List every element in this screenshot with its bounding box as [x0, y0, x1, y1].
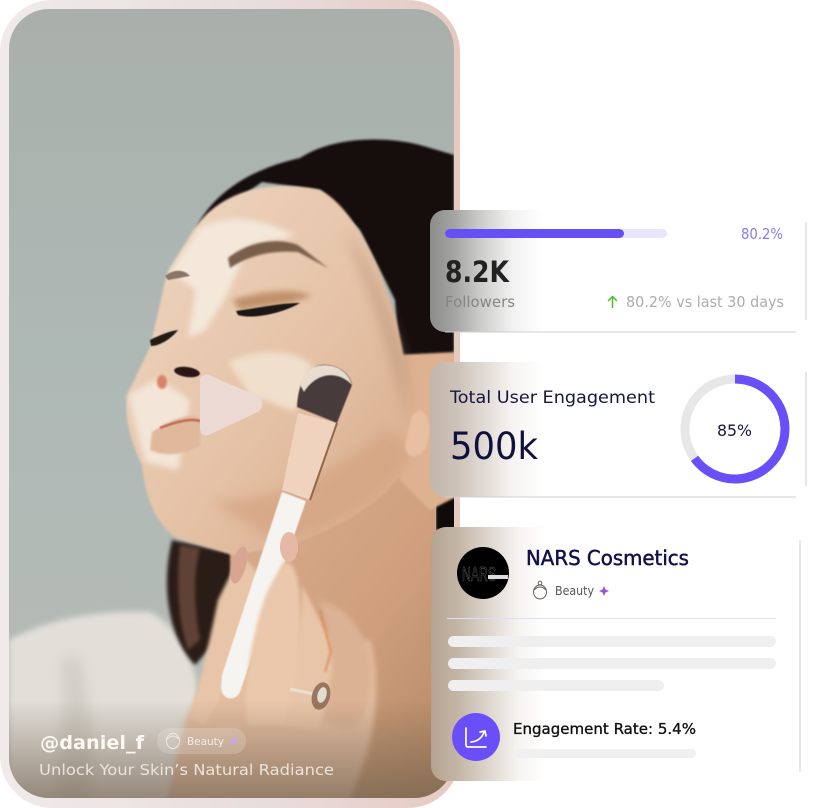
- progress percent: 80.2%: [741, 225, 783, 243]
- card bottom edge: [445, 331, 796, 333]
- lip line: [160, 420, 200, 428]
- icon: sparkle: [229, 736, 239, 746]
- brush bristles: [297, 365, 352, 423]
- hair strand: [178, 545, 200, 650]
- hair wisps at temple: [351, 244, 409, 397]
- front finger: [246, 562, 301, 725]
- handle: @daniel_f: [40, 732, 145, 754]
- icon: face: [534, 581, 546, 599]
- card background: [430, 362, 806, 497]
- bottom fade: [9, 700, 454, 798]
- followers value: 8.2K: [445, 255, 510, 289]
- fingernail back: [230, 546, 247, 584]
- nose tip: [157, 375, 167, 389]
- brush ferrule: [282, 413, 337, 500]
- card background: [431, 527, 800, 781]
- nostril: [173, 365, 201, 379]
- placeholder line 2: [448, 658, 776, 669]
- donut percent: 85%: [717, 421, 752, 440]
- bristle cream tip: [300, 365, 352, 392]
- followers label: Followers: [445, 293, 515, 311]
- ring finger: [298, 587, 332, 716]
- brand logo: [457, 547, 509, 599]
- eyebrow right: [228, 241, 328, 268]
- face: [126, 186, 412, 555]
- mask cream cheek: [228, 352, 312, 412]
- card edge: [805, 222, 807, 320]
- brush handle: [221, 492, 306, 698]
- lips: [150, 416, 200, 454]
- divider: [447, 618, 776, 620]
- eye right lashes: [236, 303, 300, 317]
- hand palm: [165, 640, 376, 808]
- ring: [290, 680, 333, 712]
- photo: woman applying face mask with brush: [9, 9, 456, 808]
- eyelid shadow: [232, 291, 312, 310]
- panel: followers: [430, 210, 806, 332]
- ferrule edge: [310, 423, 337, 500]
- neck and chest: [228, 476, 446, 798]
- lower hair: [436, 498, 454, 531]
- pill label: Beauty: [187, 735, 224, 748]
- play button: [203, 378, 260, 432]
- panel: brand card: [431, 527, 800, 781]
- icon: growth chart: [452, 713, 500, 761]
- placeholder line 3: [448, 680, 664, 691]
- placeholder line 1: [448, 636, 776, 647]
- eyebrow left: [165, 271, 190, 280]
- card background: [430, 210, 806, 332]
- card heading: Total User Engagement: [449, 388, 655, 408]
- icon: sparkle: [599, 586, 609, 596]
- ear: [405, 410, 430, 456]
- category label: Beauty: [555, 584, 594, 598]
- fingernail front: [280, 532, 298, 562]
- card edge: [805, 372, 807, 486]
- trend text: 80.2% vs last 30 days: [626, 293, 784, 311]
- progress fill: [445, 229, 624, 238]
- brand name: NARS Cosmetics: [526, 546, 689, 570]
- brand logo: NARS: [462, 564, 496, 586]
- caption: Unlock Your Skin’s Natural Radiance: [39, 761, 334, 779]
- engagement rate: Engagement Rate: 5.4%: [513, 720, 696, 738]
- mask cream forehead: [170, 219, 296, 338]
- placeholder line 4: [513, 749, 696, 758]
- shirt fold: [61, 658, 90, 776]
- icon: up arrow: [608, 296, 617, 308]
- icon: face: [166, 734, 180, 748]
- finger gap glow: [320, 610, 331, 672]
- hair behind neck: [167, 540, 240, 665]
- photo backdrop: [9, 9, 454, 798]
- phone frame: [0, 0, 460, 808]
- donut chart: [685, 379, 785, 479]
- engagement value: 500k: [450, 425, 539, 468]
- white shirt: [9, 612, 198, 808]
- hair: [196, 139, 454, 362]
- pinky finger: [320, 601, 370, 726]
- mask cream lower face: [128, 378, 190, 470]
- side of neck near ear: [400, 350, 454, 510]
- panel: total user engagement: [430, 362, 806, 497]
- back finger: [194, 560, 256, 702]
- jaw shadow: [218, 434, 406, 538]
- eye left lashes: [150, 330, 178, 346]
- category pill on photo: [157, 728, 246, 754]
- card bottom edge: [445, 496, 796, 498]
- card edge: [799, 540, 801, 772]
- progress track: [445, 229, 667, 238]
